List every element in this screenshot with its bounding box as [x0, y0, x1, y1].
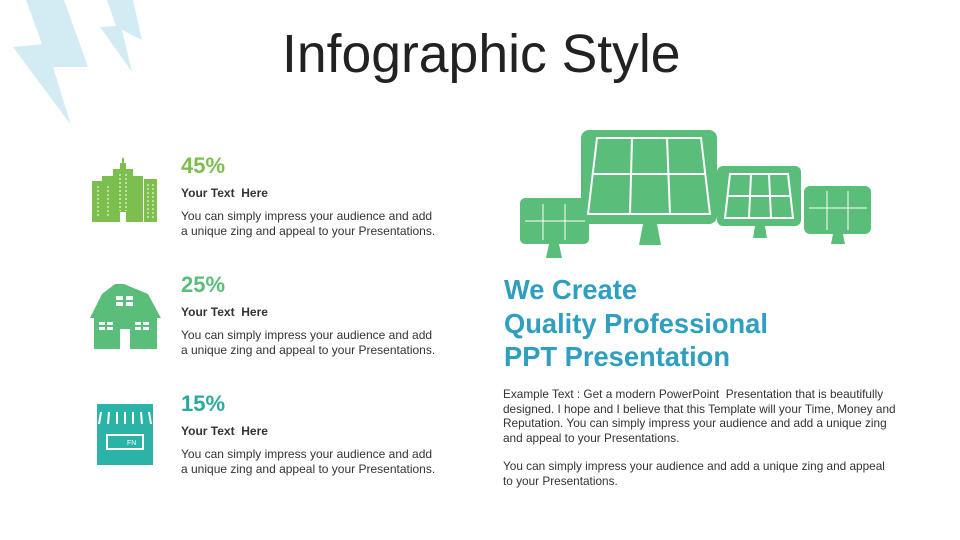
illustration: solar panels: [520, 130, 871, 258]
block 25%: [181, 272, 435, 356]
decoration: lightning bolts: [13, 0, 142, 125]
text block: closing: You can simply impress your audience and add a unique zing and appeal to your Presentations.: [503, 459, 885, 488]
block 45%: Your Text Here: [181, 186, 268, 200]
block 15%: 15%: [181, 391, 225, 416]
heading: we create: PPT Presentation: [504, 341, 730, 372]
block 15%: a unique zing and appeal to your Presentations.: [181, 462, 435, 476]
block 45%: 45%: [181, 153, 225, 178]
title: Infographic Style: [282, 25, 681, 84]
heading: we create: Quality Professional: [504, 308, 768, 338]
block 45%: a unique zing and appeal to your Presentations.: [181, 224, 435, 238]
heading: we create: We Create: [504, 274, 637, 305]
block 25%: a unique zing and appeal to your Presentations.: [181, 342, 435, 356]
icon: city buildings: [92, 158, 157, 222]
block 15%: You can simply impress your audience and add: [181, 447, 432, 461]
text block: example: Example Text : Get a modern PowerPoint Presentation that is beautifully designed. I hope and I believe that this Template will your Time, Money and Reputation. You can simply impress your audience and add a unique zing and appeal to your Presentations.: [503, 387, 896, 444]
icon: shop: [97, 404, 153, 465]
icon: shop: FN: [127, 440, 136, 447]
block 45%: You can simply impress your audience and add: [181, 209, 432, 223]
heading: we create: [504, 274, 768, 372]
block 25%: You can simply impress your audience and add: [181, 328, 432, 342]
block 15%: [181, 391, 435, 476]
icon: house: [90, 284, 161, 349]
block 45%: [181, 153, 435, 238]
block 25%: Your Text Here: [181, 305, 268, 319]
block 25%: 25%: [181, 272, 225, 297]
block 15%: Your Text Here: [181, 424, 268, 438]
